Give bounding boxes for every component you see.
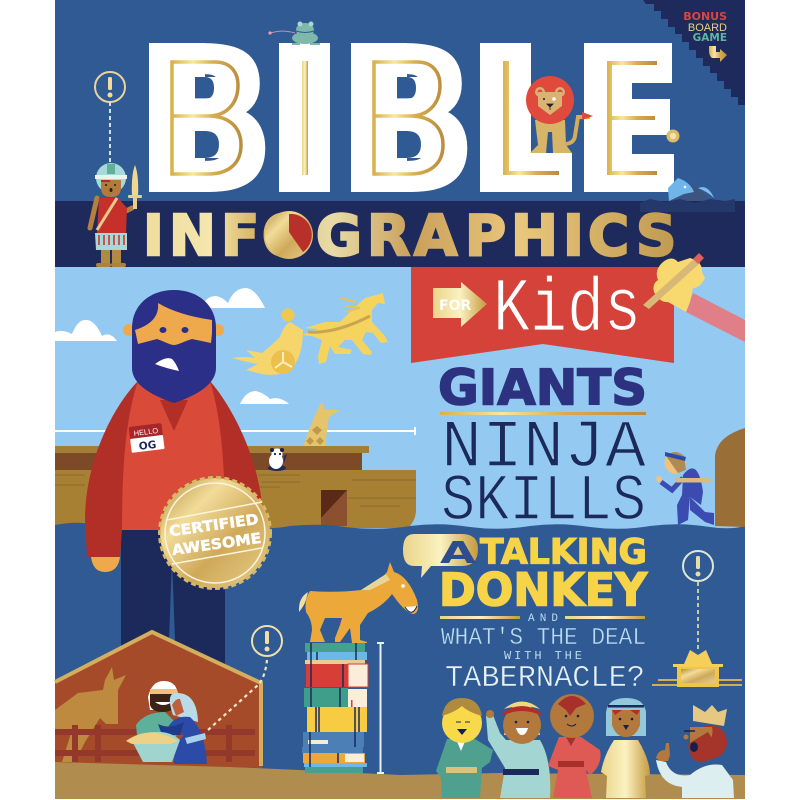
cloud left xyxy=(55,320,117,341)
pie chart O xyxy=(265,211,313,259)
navy band xyxy=(55,201,745,267)
headline: with the: WITH THE xyxy=(504,649,582,663)
sky xyxy=(55,267,745,529)
character: man gold robe xyxy=(601,698,650,798)
rock xyxy=(715,428,745,527)
headline: donkey: DONKEY xyxy=(439,564,648,616)
stable donkey silhouette xyxy=(55,667,126,762)
name tag: OG xyxy=(138,439,157,453)
seal: certified awesome xyxy=(160,478,270,588)
icon: alert xyxy=(252,626,282,656)
character: boy xyxy=(436,698,493,798)
cloud low xyxy=(240,391,289,404)
speech bubble: A: A xyxy=(440,536,477,571)
icon: alert with soldier xyxy=(95,72,125,164)
cloud top xyxy=(202,288,265,308)
headline: talking: TALKING xyxy=(480,532,647,572)
character: girl xyxy=(486,702,550,798)
background: dark blue top xyxy=(55,0,745,202)
icon: panda xyxy=(268,448,287,471)
headline: giants: GIANTS xyxy=(438,360,647,416)
bonus corner: dark triangle: BOARD xyxy=(688,22,727,34)
character: king xyxy=(656,705,734,798)
body sweater xyxy=(85,381,262,572)
headline: for kids banner xyxy=(411,267,674,363)
manger xyxy=(126,732,180,762)
icon: chariot of fire xyxy=(232,293,388,375)
ninja figure xyxy=(656,452,714,525)
character: man red xyxy=(548,694,601,798)
dashed line to alert xyxy=(208,660,267,730)
water xyxy=(55,523,745,775)
name tag: HELLO xyxy=(133,426,159,438)
title: INFOGRAPHICS: INFOGRAPHICS xyxy=(143,204,676,269)
ark xyxy=(55,446,416,528)
book stack xyxy=(302,643,368,773)
soldier xyxy=(90,163,142,267)
icon: lion xyxy=(526,76,593,153)
icon: giraffe xyxy=(303,402,340,447)
headline: skills: SKILLS xyxy=(441,464,646,539)
head xyxy=(123,290,224,403)
icon: frog xyxy=(268,22,320,44)
arrow: for: FOR xyxy=(439,298,471,314)
bonus corner: dark triangle: GAME xyxy=(693,32,727,44)
icon: alert xyxy=(683,551,713,650)
pants xyxy=(121,530,225,700)
nativity stable xyxy=(55,631,267,768)
and divider xyxy=(440,613,645,625)
headline: for kids banner: Kids xyxy=(493,267,641,353)
seal: certified awesome: AWESOME xyxy=(171,531,262,559)
and divider: AND xyxy=(528,613,558,625)
headline: ninja: NINJA xyxy=(441,410,646,487)
ground xyxy=(55,762,745,799)
speech bubble: A xyxy=(403,534,478,578)
horizon line xyxy=(55,427,416,435)
seal: certified awesome: CERTIFIED xyxy=(168,512,260,540)
title: BIBLE: BIBLE xyxy=(135,7,696,235)
height measure xyxy=(377,642,384,774)
icon: hand and pencil xyxy=(643,253,745,342)
title: BIBLE xyxy=(149,43,674,192)
icon: talking donkey xyxy=(299,562,418,643)
name tag xyxy=(129,423,165,454)
icon: fish and whale xyxy=(640,178,735,212)
divider gold xyxy=(440,412,646,415)
bonus corner: dark triangle: BONUS xyxy=(683,10,727,23)
giant: OG xyxy=(85,290,262,700)
headline: tabernacle: TABERNACLE? xyxy=(445,661,645,696)
mary and joseph xyxy=(136,681,207,764)
arrow: for xyxy=(433,282,487,327)
bonus corner: dark triangle xyxy=(643,0,745,105)
headline: what's the deal: WHAT'S THE DEAL xyxy=(441,625,646,652)
icon: ark of the covenant xyxy=(652,650,742,687)
gold dot xyxy=(666,130,680,142)
